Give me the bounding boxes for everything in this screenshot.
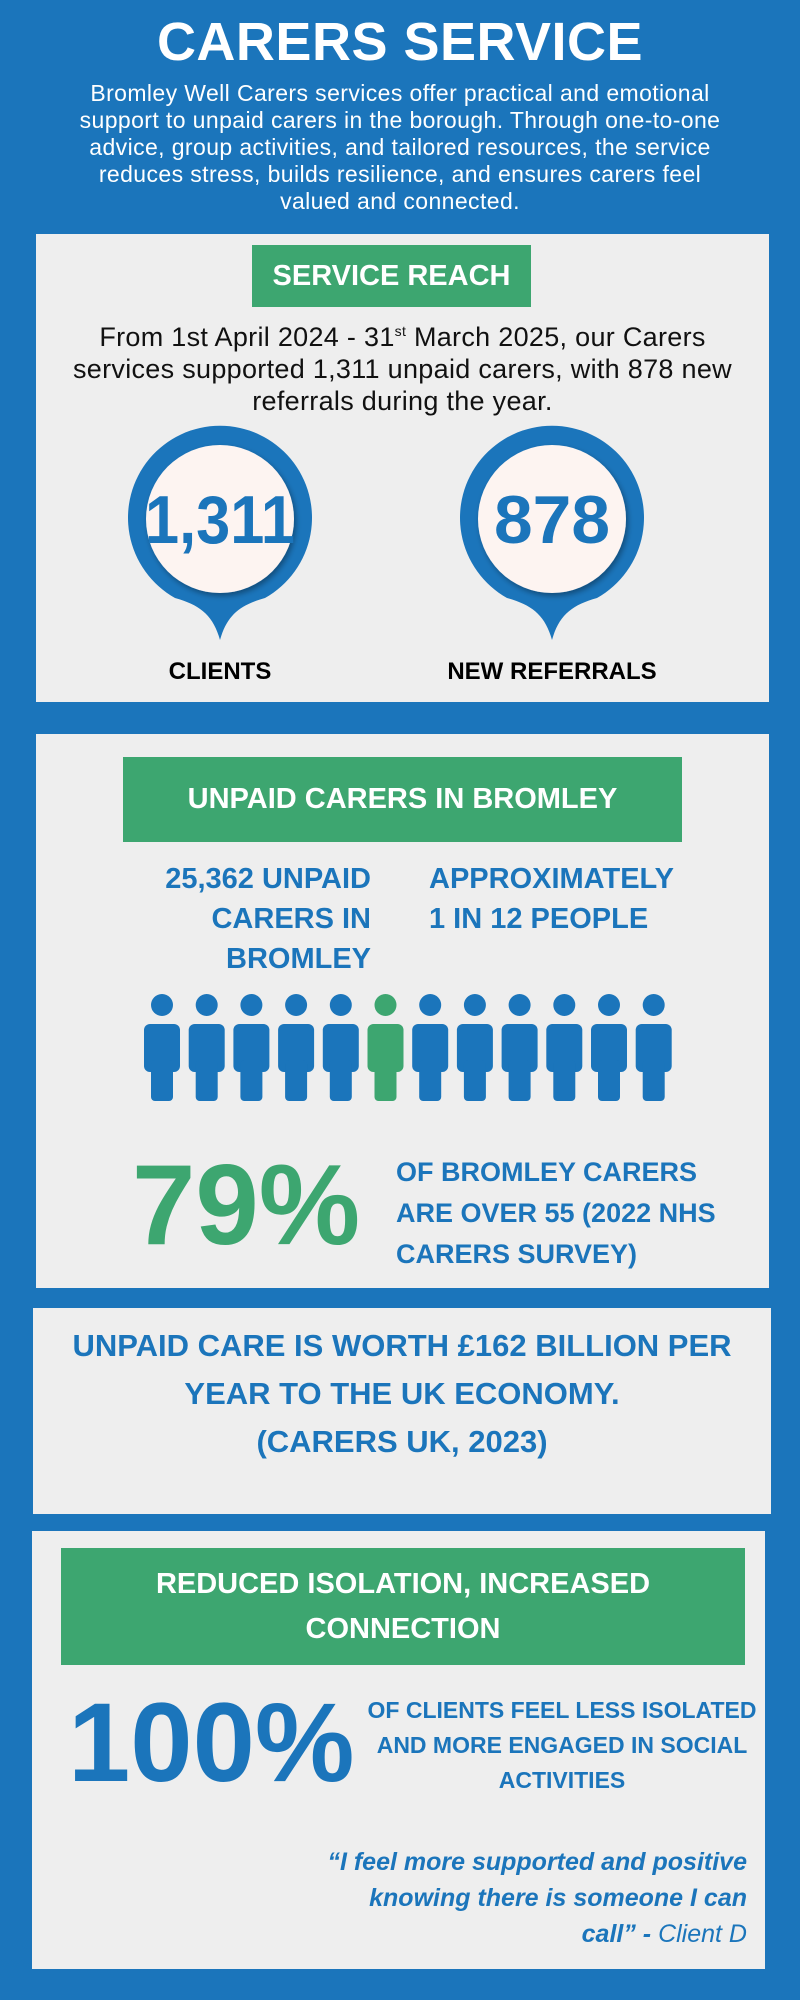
quote: “I feel more supported and positive (327, 1848, 747, 1876)
heading: unpaid carers (123, 757, 682, 842)
stat: 79%: 79% (132, 1142, 360, 1269)
icon: pin clients: 1,311 (145, 482, 295, 558)
intro text: support to unpaid carers in the borough. Through one-to-one (80, 107, 720, 133)
text block: reach summary: From 1st April 2024 - 31st March 2025, our Carers (99, 322, 706, 352)
label: clients: CLIENTS (169, 658, 271, 685)
heading: reduced isolation (61, 1548, 745, 1665)
intro text: valued and connected. (280, 188, 520, 214)
heading: service reach (252, 245, 531, 307)
stat: 1 in 12: 1 IN 12 PEOPLE (429, 903, 648, 935)
text block: reach summary: services supported 1,311 unpaid carers, with 878 new (73, 354, 732, 384)
quote: call” - Client D (582, 1920, 747, 1948)
label: new referrals: NEW REFERRALS (447, 658, 657, 685)
stat: 25,362 carers: BROMLEY (226, 943, 371, 975)
stat: 1 in 12 (429, 863, 674, 935)
text: less isolated: ACTIVITIES (499, 1767, 625, 1793)
heading: reduced isolation: REDUCED ISOLATION, INCREASED (156, 1568, 650, 1600)
quote (327, 1848, 747, 1948)
heading: reduced isolation: CONNECTION (306, 1612, 500, 1644)
icon: pin referrals: 878 (494, 482, 610, 558)
panel: economic value (33, 1308, 771, 1514)
panel: service reach (36, 234, 769, 702)
intro text (80, 80, 720, 214)
stat: 1 in 12: APPROXIMATELY (429, 863, 674, 895)
text: over 55: ARE OVER 55 (2022 NHS (396, 1198, 716, 1228)
intro text: reduces stress, builds resilience, and ensures carers feel (99, 161, 701, 187)
heading: unpaid carers: UNPAID CARERS IN BROMLEY (188, 783, 617, 815)
text block: reach summary: referrals during the year. (252, 386, 553, 416)
text: £162 billion: UNPAID CARE IS WORTH £162 BILLION PER (72, 1328, 732, 1363)
stat: 25,362 carers (165, 863, 371, 975)
panel: unpaid carers in bromley (36, 734, 769, 1288)
text: over 55: OF BROMLEY CARERS (396, 1157, 697, 1187)
intro text: advice, group activities, and tailored resources, the service (89, 134, 711, 160)
stat: 25,362 carers: CARERS IN (211, 903, 371, 935)
text: over 55: CARERS SURVEY) (396, 1239, 637, 1269)
text: £162 billion (72, 1328, 732, 1459)
icon: pin referrals (460, 426, 644, 640)
text: £162 billion: YEAR TO THE UK ECONOMY. (184, 1376, 620, 1411)
text: less isolated (368, 1697, 756, 1793)
chart: people pictogram (144, 994, 672, 1101)
heading: service reach: SERVICE REACH (273, 260, 510, 292)
title: CARERS SERVICE (157, 12, 643, 72)
text: over 55 (396, 1157, 716, 1269)
intro text: Bromley Well Carers services offer practical and emotional (90, 80, 710, 106)
quote: knowing there is someone I can (369, 1884, 747, 1912)
text: £162 billion: (CARERS UK, 2023) (256, 1424, 548, 1459)
stat: 25,362 carers: 25,362 UNPAID (165, 863, 371, 895)
text: less isolated: AND MORE ENGAGED IN SOCIAL (377, 1732, 747, 1758)
icon: pin clients (128, 426, 312, 640)
text: less isolated: OF CLIENTS FEEL LESS ISOLATED (368, 1697, 756, 1723)
chart: pin counters (128, 426, 644, 640)
stat: 100%: 100% (68, 1680, 354, 1805)
text block: reach summary (73, 322, 732, 416)
panel: reduced isolation (32, 1531, 765, 1969)
